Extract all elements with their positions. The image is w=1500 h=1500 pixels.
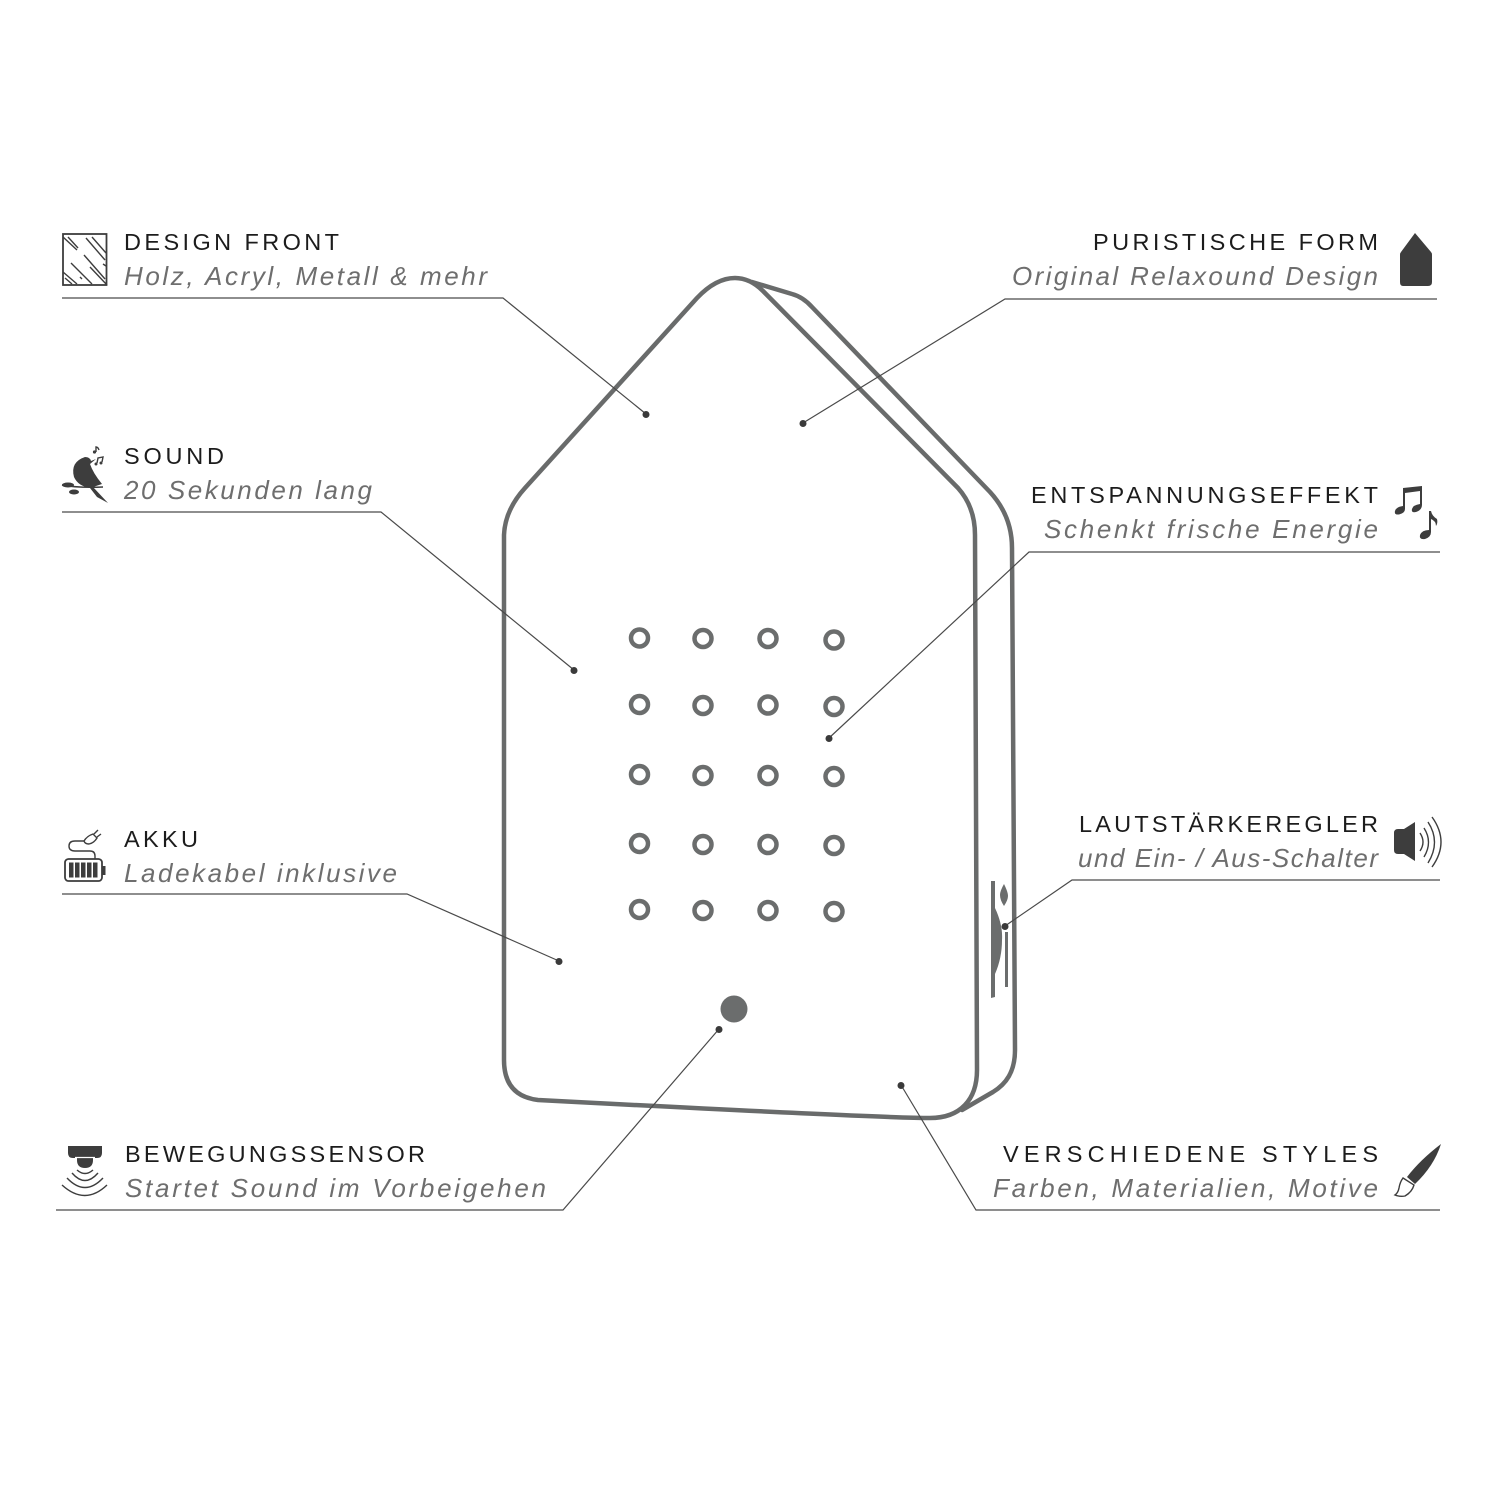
callout: entspannungseffekt xyxy=(826,482,1440,742)
leader dot xyxy=(1002,923,1008,930)
icon: motion sensor with waves xyxy=(62,1146,107,1196)
heading: ENTSPANNUNGSEFFEKT xyxy=(1031,482,1378,508)
callout: puristische form xyxy=(800,229,1437,427)
box front outline xyxy=(504,278,977,1118)
leader dot xyxy=(642,411,650,418)
icon: singing bird on branch xyxy=(62,447,108,503)
leader line xyxy=(62,512,574,670)
leader line xyxy=(901,1085,1440,1210)
heading: PURISTISCHE FORM xyxy=(1093,229,1378,255)
leader dot xyxy=(570,667,578,674)
callout: sound xyxy=(62,443,578,674)
callout: verschiedene styles xyxy=(898,1082,1441,1210)
leader dot xyxy=(556,958,562,965)
icon: music notes xyxy=(1395,486,1437,539)
leader dot xyxy=(898,1082,904,1089)
leader line xyxy=(62,894,559,961)
box side outline xyxy=(752,282,1015,1110)
leader dot xyxy=(716,1026,722,1033)
icon: house silhouette xyxy=(1400,233,1432,286)
heading: DESIGN FRONT xyxy=(124,229,339,255)
leader line xyxy=(62,298,646,414)
leader line xyxy=(1005,880,1440,926)
heading: LAUTSTÄRKEREGLER xyxy=(1079,811,1378,837)
icon: paint brush xyxy=(1395,1144,1441,1196)
subtitle: Original Relaxound Design xyxy=(1012,261,1378,291)
icon: glass panel xyxy=(63,234,107,285)
heading: BEWEGUNGSSENSOR xyxy=(125,1141,425,1167)
subtitle: Ladekabel inklusive xyxy=(124,858,397,888)
subtitle: Farben, Materialien, Motive xyxy=(993,1173,1378,1203)
leader dot xyxy=(826,735,832,742)
icon: speaker with sound waves xyxy=(1394,817,1441,867)
callout: bewegungssensor xyxy=(56,1026,722,1210)
subtitle: Schenkt frische Energie xyxy=(1044,514,1378,544)
leader line xyxy=(803,299,1437,423)
subtitle: Startet Sound im Vorbeigehen xyxy=(125,1173,546,1203)
callout: design front xyxy=(62,229,650,418)
leader dot xyxy=(800,420,806,427)
heading: AKKU xyxy=(124,826,198,852)
callout: lautstaerkeregler xyxy=(1002,811,1441,930)
leader line xyxy=(56,1029,719,1210)
subtitle: 20 Sekunden lang xyxy=(123,475,373,505)
product illustration: sound box xyxy=(504,278,1015,1118)
leader line xyxy=(829,552,1440,738)
subtitle: Holz, Acryl, Metall & mehr xyxy=(124,261,488,291)
motion sensor xyxy=(720,996,748,1022)
icon: battery with charging cable xyxy=(65,830,106,881)
callout: akku xyxy=(62,826,562,965)
heading: SOUND xyxy=(124,443,224,469)
speaker holes grid xyxy=(631,630,842,920)
heading: VERSCHIEDENE STYLES xyxy=(1003,1141,1378,1167)
side switch with bird logo xyxy=(991,881,1008,998)
subtitle: und Ein- / Aus-Schalter xyxy=(1078,843,1379,873)
